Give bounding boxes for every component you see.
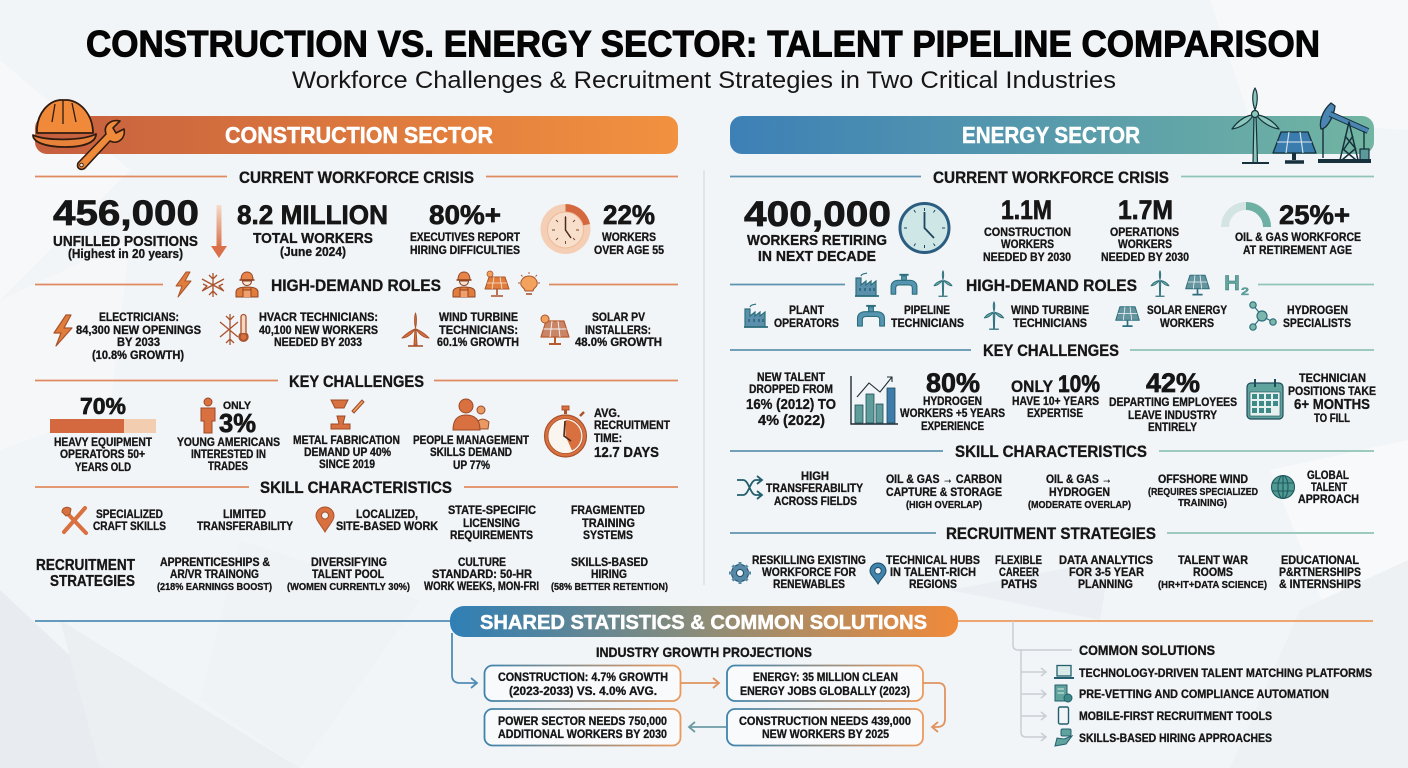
strategy: data analytics	[1059, 553, 1153, 591]
stat: technician positions: POSITIONS TAKE	[1288, 384, 1376, 398]
strategy: culture	[424, 557, 539, 593]
stat: people management: SKILLS DEMAND	[430, 447, 512, 459]
skill: localized site-based work: LOCALIZED,	[356, 507, 418, 521]
heading: shared statistics pill	[450, 606, 958, 637]
strategy: flexible career paths: CAREER	[999, 565, 1039, 579]
role: pipeline technicians	[858, 303, 964, 330]
role: electricians	[54, 312, 201, 362]
strategy: skills-based hiring: HIRING	[591, 569, 627, 581]
skill: oil and gas to hydrogen: OIL & GAS →	[1046, 472, 1112, 486]
skill: oil and gas to carbon capture	[886, 472, 1002, 511]
stat: 70% heavy equipment: 70%	[80, 393, 126, 419]
card: energy jobs	[727, 666, 923, 701]
icon: lightning bolt	[54, 315, 72, 346]
skill: fragmented training: SYSTEMS	[583, 528, 633, 542]
role: wind turbine technicians: TECHNICIANS:	[439, 325, 518, 337]
strategy: diversifying: (WOMEN CURRENTLY 30%)	[287, 581, 410, 593]
skill: global talent approach: TALENT	[1311, 480, 1348, 494]
stat: metal fabrication: METAL FABRICATION	[293, 435, 400, 447]
icon: document with gear	[1055, 685, 1072, 702]
icon: person	[201, 398, 215, 433]
icon: hard hat and wrench	[33, 100, 124, 169]
card: power sector: ADDITIONAL WORKERS BY 2030	[498, 727, 667, 741]
role: solar pv installers: SOLAR PV	[592, 312, 645, 324]
card: construction needs: CONSTRUCTION NEEDS 439,000	[739, 714, 911, 728]
role: solar energy workers: SOLAR ENERGY	[1147, 303, 1227, 317]
stat: 22% workers over 55: WORKERS	[602, 232, 656, 244]
role: hvacr technicians	[220, 312, 378, 349]
role: pipeline technicians: PIPELINE	[904, 303, 950, 317]
card: construction needs	[727, 709, 923, 746]
stat: 1.1M construction workers: WORKERS	[1001, 237, 1054, 251]
skill: high transferability: ACROSS FIELDS	[774, 494, 857, 508]
stat: 1.7M operations workers: NEEDED BY 2030	[1101, 250, 1189, 264]
skill: state-specific licensing: REQUIREMENTS	[450, 528, 533, 542]
stat: only 10%: 10%	[1058, 371, 1100, 398]
stat: only 10%: ONLY	[1011, 377, 1054, 396]
skill: offshore wind: (REQUIRES SPECIALIZED	[1148, 486, 1258, 498]
stat: 25%+ retirement age: OIL & GAS WORKFORCE	[1235, 230, 1361, 244]
icon: calendar	[1247, 379, 1283, 419]
skill: offshore wind: TRAINING)	[1178, 497, 1227, 509]
role: plant operators	[744, 303, 839, 330]
stat: average recruitment time: 12.7 DAYS	[594, 444, 659, 461]
stat: technician positions: TECHNICIAN	[1299, 371, 1366, 385]
strategy: skills-based hiring: SKILLS-BASED	[571, 557, 648, 569]
icon: location pin	[870, 563, 886, 584]
icon: gear	[729, 562, 751, 584]
skill: oil and gas to hydrogen: HYDROGEN	[1049, 485, 1110, 499]
strategy: reskilling: RESKILLING EXISTING	[752, 553, 866, 567]
role: wind turbine technicians: WIND TURBINE	[1011, 303, 1089, 317]
subtitle: Workforce Challenges & Recruitment Strategies in Two Critical Industries	[292, 67, 1116, 94]
solution: skills-based hiring	[1055, 729, 1272, 746]
icon: down arrow	[211, 205, 227, 258]
skill: limited transferability: TRANSFERABILITY	[197, 519, 293, 533]
icon: globe	[1272, 476, 1294, 498]
energy banner: ENERGY SECTOR	[962, 122, 1140, 148]
heading: skill characteristics: SKILL CHARACTERISTICS	[955, 442, 1147, 461]
strategy: talent war rooms: ROOMS	[1193, 565, 1233, 579]
stat: 25%+ retirement age	[1235, 200, 1361, 257]
progress bar: 70%	[50, 419, 156, 433]
strategy: flexible career paths: FLEXIBLE	[995, 553, 1042, 567]
heading: key challenges: KEY CHALLENGES	[289, 372, 424, 391]
icon: wind turbine	[984, 302, 1004, 329]
strategy: apprenticeships: APPRENTICESHIPS &	[160, 557, 270, 569]
icon: laptop	[1054, 666, 1074, 678]
strategy: culture: STANDARD: 50-HR	[432, 569, 533, 581]
heading: recruitment strategies: STRATEGIES	[50, 573, 135, 590]
heading: high-demand roles with icons: 2	[1241, 286, 1249, 298]
stat: technician positions: TO FILL	[1314, 411, 1350, 425]
section: construction skill characteristics	[35, 478, 678, 542]
panel: construction sector	[33, 100, 678, 593]
stat: only 3% young americans: ONLY	[223, 400, 252, 412]
role: hvacr technicians: NEEDED BY 2033	[274, 337, 362, 349]
role: wind turbine technicians: WIND TURBINE	[439, 312, 518, 324]
role: solar pv installers: 48.0% GROWTH	[575, 337, 662, 349]
card: energy jobs: ENERGY: 35 MILLION CLEAN	[753, 670, 898, 684]
stat: 42% departing employees: ENTIRELY	[1148, 420, 1197, 434]
strategy: educational partnerships	[1279, 553, 1361, 591]
stat: new talent dropped: NEW TALENT	[757, 372, 825, 384]
role: solar energy workers	[1116, 303, 1227, 330]
strategy: flexible career paths	[995, 553, 1042, 591]
construction banner: CONSTRUCTION SECTOR	[225, 122, 493, 148]
stat: average recruitment time: RECRUITMENT	[594, 420, 670, 432]
heading: skill characteristics: SKILL CHARACTERISTICS	[260, 478, 452, 497]
heading: high-demand roles with icons: HIGH-DEMAND ROLES	[271, 276, 441, 295]
strategy: diversifying	[287, 557, 410, 593]
skill: specialized craft skills: SPECIALIZED	[96, 507, 163, 521]
stat: only 3% young americans: YOUNG AMERICANS	[177, 437, 280, 449]
solution: mobile-first tools	[1058, 707, 1272, 724]
strategy: talent war rooms	[1158, 553, 1267, 591]
icon: location pin	[316, 507, 334, 532]
heading: high-demand roles with icons: HIGH-DEMAND ROLES	[966, 276, 1137, 295]
solution: skills-based hiring: SKILLS-BASED HIRING APPROACHES	[1079, 731, 1272, 745]
title: CONSTRUCTION VS. ENERGY SECTOR: TALENT PIPELINE COMPARISON	[86, 24, 1320, 64]
stat: 456,000 unfilled positions: (Highest in 20 years)	[68, 247, 183, 261]
arrow: energy to construction needs	[923, 683, 945, 732]
panel: energy sector	[729, 88, 1376, 591]
strategy: apprenticeships: AR/VR TRAINONG	[170, 569, 259, 581]
icon: stopwatch	[544, 406, 586, 457]
tree lines: common solutions	[1013, 621, 1072, 741]
section: construction workforce crisis	[35, 169, 678, 261]
icon: people	[453, 399, 489, 430]
stat: 1.1M construction workers: NEEDED BY 2030	[983, 250, 1071, 264]
strategy: technical hubs	[870, 553, 980, 591]
role: hvacr technicians: HVACR TECHNICIANS:	[259, 312, 378, 324]
stat: 400,000 workers retiring: 400,000	[744, 195, 891, 234]
skill: specialized craft skills	[62, 507, 166, 533]
heading: high-demand roles with icons	[35, 271, 678, 297]
role: plant operators: OPERATORS	[774, 316, 839, 330]
stat: 8.2 million total workers: (June 2024)	[280, 245, 346, 259]
card: construction growth: CONSTRUCTION: 4.7% GROWTH	[498, 670, 668, 684]
section: construction recruitment strategies	[36, 557, 668, 593]
stat: average recruitment time: AVG.	[594, 408, 620, 420]
role: electricians: BY 2033	[117, 337, 160, 349]
heading: recruitment strategies: RECRUITMENT	[36, 557, 135, 574]
strategy: skills-based hiring	[551, 557, 668, 593]
stat: new talent dropped	[746, 372, 836, 429]
skill: high transferability	[737, 469, 863, 508]
stat: 1.7M operations workers	[1101, 195, 1189, 264]
stat: 1.7M operations workers: WORKERS	[1118, 237, 1172, 251]
role: hydrogen specialists	[1250, 302, 1351, 330]
stat: 80% hydrogen workers: 80%	[926, 368, 980, 398]
stat: 1.7M operations workers: 1.7M	[1118, 195, 1173, 225]
strategy: skills-based hiring: (58% BETTER RETENTION)	[551, 581, 668, 593]
stat: 400,000 workers retiring: WORKERS RETIRING	[747, 232, 887, 249]
skill: oil and gas to carbon capture: (HIGH OVERLAP)	[906, 499, 982, 511]
skill: fragmented training: FRAGMENTED	[571, 503, 645, 517]
stat: 25%+ retirement age: AT RETIREMENT AGE	[1243, 243, 1352, 257]
skill: specialized craft skills: CRAFT SKILLS	[93, 519, 166, 533]
role: wind turbine technicians: TECHNICIANS	[1013, 316, 1087, 330]
stat: 80% hydrogen workers: WORKERS +5 YEARS	[900, 406, 1005, 420]
skill: fragmented training: TRAINING	[582, 516, 635, 530]
role: hvacr technicians: 40,100 NEW WORKERS	[259, 325, 378, 337]
role: solar pv installers	[541, 312, 662, 349]
heading: high-demand roles with icons: H	[1224, 272, 1240, 295]
strategy: apprenticeships: (218% EARNINGS BOOST)	[157, 581, 272, 593]
card: power sector	[484, 709, 680, 746]
role: plant operators: PLANT	[789, 303, 825, 317]
panel: shared statistics and common solutions	[35, 606, 1373, 746]
role: wind turbine technicians: 60.1% GROWTH	[437, 337, 519, 349]
strategy: diversifying: TALENT POOL	[312, 569, 384, 581]
stat: average recruitment time	[544, 406, 670, 461]
role: hydrogen specialists: HYDROGEN	[1287, 303, 1348, 317]
icon: factory	[744, 304, 768, 327]
icon: mobile phone	[1058, 707, 1068, 724]
strategy: diversifying: DIVERSIFYING	[311, 557, 387, 569]
heading: current workforce crisis: CURRENT WORKFORCE CRISIS	[933, 169, 1169, 187]
strategy: culture: CULTURE	[458, 557, 506, 569]
heading: key challenges: KEY CHALLENGES	[983, 341, 1119, 360]
icon: metal fabrication anvil	[331, 400, 364, 429]
strategy: culture: WORK WEEKS, MON-FRI	[424, 581, 539, 593]
section: energy workforce crisis	[730, 169, 1374, 265]
stat: 42% departing employees: DEPARTING EMPLOYEES	[1109, 395, 1237, 409]
stat: people management: PEOPLE MANAGEMENT	[413, 435, 529, 447]
strategy: technical hubs: REGIONS	[909, 577, 957, 591]
strategy: apprenticeships	[157, 557, 272, 593]
solution: mobile-first tools: MOBILE-FIRST RECRUITMENT TOOLS	[1079, 709, 1272, 723]
stat: only 10%: HAVE 10+ YEARS	[1012, 394, 1099, 408]
strategy: educational partnerships: & INTERNSHIPS	[1279, 577, 1361, 591]
section: energy recruitment strategies	[729, 524, 1374, 591]
stat: new talent dropped: DROPPED FROM	[749, 384, 833, 396]
stat: 22% workers over 55	[594, 200, 665, 257]
section: energy key challenges	[730, 341, 1376, 434]
stat: metal fabrication	[293, 400, 400, 471]
heading: industry growth projections: INDUSTRY GROWTH PROJECTIONS	[596, 644, 812, 660]
card: construction growth: (2023-2033) VS. 4.0% AVG.	[509, 684, 657, 698]
strategy: data analytics: PLANNING	[1078, 577, 1133, 591]
stat: 1.7M operations workers: OPERATIONS	[1110, 225, 1179, 239]
role: wind turbine technicians	[402, 312, 519, 349]
skill: oil and gas to carbon capture: OIL & GAS → CARBON	[886, 472, 1002, 486]
stat: 8.2 million total workers	[237, 200, 388, 259]
stat: only 10%: EXPERTISE	[1027, 406, 1083, 420]
connector lines	[35, 621, 1373, 688]
skill: state-specific licensing: LICENSING	[463, 516, 520, 530]
heading: recruitment strategies: RECRUITMENT STRATEGIES	[946, 524, 1156, 543]
stat: 22% workers over 55: OVER AGE 55	[594, 245, 665, 257]
stat: only 3% young americans: TRADES	[208, 461, 248, 473]
stat: 70% heavy equipment: OPERATORS 50+	[60, 449, 145, 461]
stat: 80%+ executives	[410, 200, 520, 257]
strategy: reskilling: WORKFORCE FOR	[762, 565, 856, 579]
skill: state-specific licensing: STATE-SPECIFIC	[448, 503, 536, 517]
stat: average recruitment time: TIME:	[594, 433, 622, 445]
section: construction key challenges	[35, 372, 678, 474]
icon: pipeline valve	[858, 306, 884, 326]
skill: fragmented training	[571, 503, 645, 542]
strategy: talent war rooms: TALENT WAR	[1178, 553, 1248, 567]
solution: talent matching platforms: TECHNOLOGY-DRIVEN TALENT MATCHING PLATFORMS	[1079, 666, 1372, 680]
stat: metal fabrication: SINCE 2019	[319, 459, 375, 471]
stat: 400,000 workers retiring	[744, 195, 891, 265]
stat: only 3% young americans	[177, 398, 280, 473]
heading: high-demand roles with icons	[730, 271, 1374, 298]
card: construction growth	[484, 666, 680, 701]
skill: localized site-based work	[316, 507, 438, 533]
role: electricians: (10.8% GROWTH)	[92, 350, 184, 362]
skill: offshore wind: OFFSHORE WIND	[1158, 472, 1248, 486]
stat: technician positions: 6+ MONTHS	[1294, 396, 1370, 413]
stat: 80% hydrogen workers: EXPERIENCE	[921, 419, 984, 433]
stat: 80%+ executives: 80%+	[429, 200, 501, 230]
strategy: talent war rooms: (HR+IT+DATA SCIENCE)	[1158, 579, 1267, 591]
stat: new talent dropped: 4% (2022)	[758, 413, 825, 429]
strategy: reskilling: RENEWABLES	[773, 577, 845, 591]
role: wind turbine technicians	[984, 302, 1089, 330]
strategy: technical hubs: IN TALENT-RICH	[890, 565, 976, 579]
skill: offshore wind	[1148, 472, 1258, 509]
skill: state-specific licensing	[448, 503, 536, 542]
role: solar energy workers: WORKERS	[1160, 316, 1214, 330]
strategy: data analytics: FOR 3-5 YEAR	[1069, 565, 1144, 579]
stat: 80%+ executives: HIRING DIFFICULTIES	[410, 245, 520, 257]
solution: compliance automation	[1055, 685, 1329, 702]
stat: 80% hydrogen workers: HYDROGEN	[923, 394, 982, 408]
card: power sector: POWER SECTOR NEEDS 750,000	[498, 714, 667, 728]
stat: people management: UP 77%	[453, 460, 490, 472]
icon: wall clock	[900, 204, 949, 252]
stat: 1.1M construction workers: 1.1M	[1001, 195, 1052, 225]
arrow: construction needs to power sector	[689, 722, 726, 732]
role: hydrogen specialists: SPECIALISTS	[1283, 316, 1351, 330]
stat: only 3% young americans: INTERESTED IN	[191, 449, 266, 461]
skill: high transferability: HIGH	[801, 469, 829, 483]
skill: oil and gas to carbon capture: CAPTURE & STORAGE	[886, 485, 1002, 499]
stat: 25%+ retirement age: 25%+	[1279, 200, 1350, 230]
role: electricians: 84,300 NEW OPENINGS	[76, 325, 201, 337]
section: energy high-demand roles	[730, 271, 1374, 330]
role: pipeline technicians: TECHNICIANS	[891, 316, 964, 330]
strategy: data analytics: DATA ANALYTICS	[1059, 553, 1153, 567]
skill: oil and gas to hydrogen	[1028, 472, 1131, 511]
construction banner	[35, 116, 678, 154]
stat: metal fabrication: DEMAND UP 40%	[304, 447, 391, 459]
skill: oil and gas to hydrogen: (MODERATE OVERLAP)	[1028, 499, 1131, 511]
strategy: technical hubs: TECHNICAL HUBS	[886, 553, 980, 567]
stat: 456,000 unfilled positions: 456,000	[53, 194, 199, 233]
skill: localized site-based work: SITE-BASED WORK	[336, 519, 438, 533]
icon: solar panel	[1116, 307, 1139, 326]
stat: 8.2 million total workers: 8.2 MILLION	[237, 200, 388, 230]
stat: 8.2 million total workers: TOTAL WORKERS	[253, 231, 373, 247]
stat: 70% heavy equipment	[50, 393, 156, 474]
icon: snowflake and thermometer	[220, 314, 248, 345]
skill: global talent approach: GLOBAL	[1307, 468, 1349, 482]
role: electricians: ELECTRICIANS:	[99, 312, 179, 324]
card: construction needs: NEW WORKERS BY 2025	[762, 727, 889, 741]
stat: 42% departing employees: 42%	[1146, 368, 1200, 398]
icon: crossed tools	[62, 507, 86, 533]
stat: only 3% young americans: 3%	[219, 408, 256, 438]
arrow: construction to energy	[681, 678, 719, 688]
skill: global talent approach: APPROACH	[1298, 492, 1359, 506]
stat: 70% heavy equipment: YEARS OLD	[75, 462, 131, 474]
chart: rising bars with trend line	[851, 376, 898, 424]
stat: 1.1M construction workers	[983, 195, 1071, 264]
skill: limited transferability	[197, 507, 293, 533]
icon: hand with badge	[1055, 729, 1072, 746]
strategy: educational partnerships: EDUCATIONAL	[1281, 553, 1359, 567]
strategy: reskilling	[729, 553, 866, 591]
stat: 42% departing employees: LEAVE INDUSTRY	[1128, 408, 1217, 422]
strategy: educational partnerships: P&RTNERSHIPS	[1279, 565, 1361, 579]
icon: shuffle arrows	[737, 476, 762, 499]
stat: 1.1M construction workers: CONSTRUCTION	[984, 225, 1071, 239]
stat: new talent dropped: 16% (2012) TO	[746, 397, 836, 413]
stat: only 10%	[1011, 371, 1100, 420]
skill: global talent approach	[1272, 468, 1359, 506]
energy banner	[730, 116, 1374, 154]
stat: technician positions	[1247, 371, 1376, 425]
stat: 42% departing employees	[1109, 368, 1237, 434]
icon: hydrogen molecule	[1250, 302, 1276, 330]
stat: 22% workers over 55: 22%	[603, 200, 655, 230]
heading: common solutions: COMMON SOLUTIONS	[1079, 643, 1215, 658]
section: construction high-demand roles	[35, 271, 678, 362]
stat: 400,000 workers retiring: IN NEXT DECADE	[758, 248, 876, 265]
icon: semicircle gauge	[1225, 206, 1267, 227]
stat: 80%+ executives: EXECUTIVES REPORT	[410, 232, 520, 244]
role: solar pv installers: INSTALLERS:	[585, 325, 651, 337]
solution: compliance automation: PRE-VETTING AND COMPLIANCE AUTOMATION	[1079, 687, 1329, 701]
heading: recruitment strategies	[36, 557, 135, 590]
skill: limited transferability: LIMITED	[223, 507, 266, 521]
card: energy jobs: ENERGY JOBS GLOBALLY (2023)	[740, 684, 910, 698]
heading: current workforce crisis: CURRENT WORKFORCE CRISIS	[239, 169, 474, 187]
stat: 80% hydrogen workers	[900, 368, 1005, 433]
strategy: flexible career paths: PATHS	[1001, 577, 1037, 591]
stat: people management	[413, 399, 529, 472]
icon: wind turbine	[402, 313, 429, 346]
heading: shared statistics pill: SHARED STATISTICS & COMMON SOLUTIONS	[480, 612, 927, 634]
icon: wind turbine, solar panel and oil pump	[1232, 88, 1371, 163]
stat: 456,000 unfilled positions	[53, 194, 199, 261]
icon: solar panel	[541, 315, 569, 344]
skill: high transferability: TRANSFERABILITY	[766, 481, 863, 495]
stat: 456,000 unfilled positions: UNFILLED POSITIONS	[53, 233, 198, 250]
section: energy skill characteristics	[730, 442, 1374, 511]
stat: 70% heavy equipment: HEAVY EQUIPMENT	[54, 437, 152, 449]
icon: clock pie 22%	[540, 204, 590, 254]
